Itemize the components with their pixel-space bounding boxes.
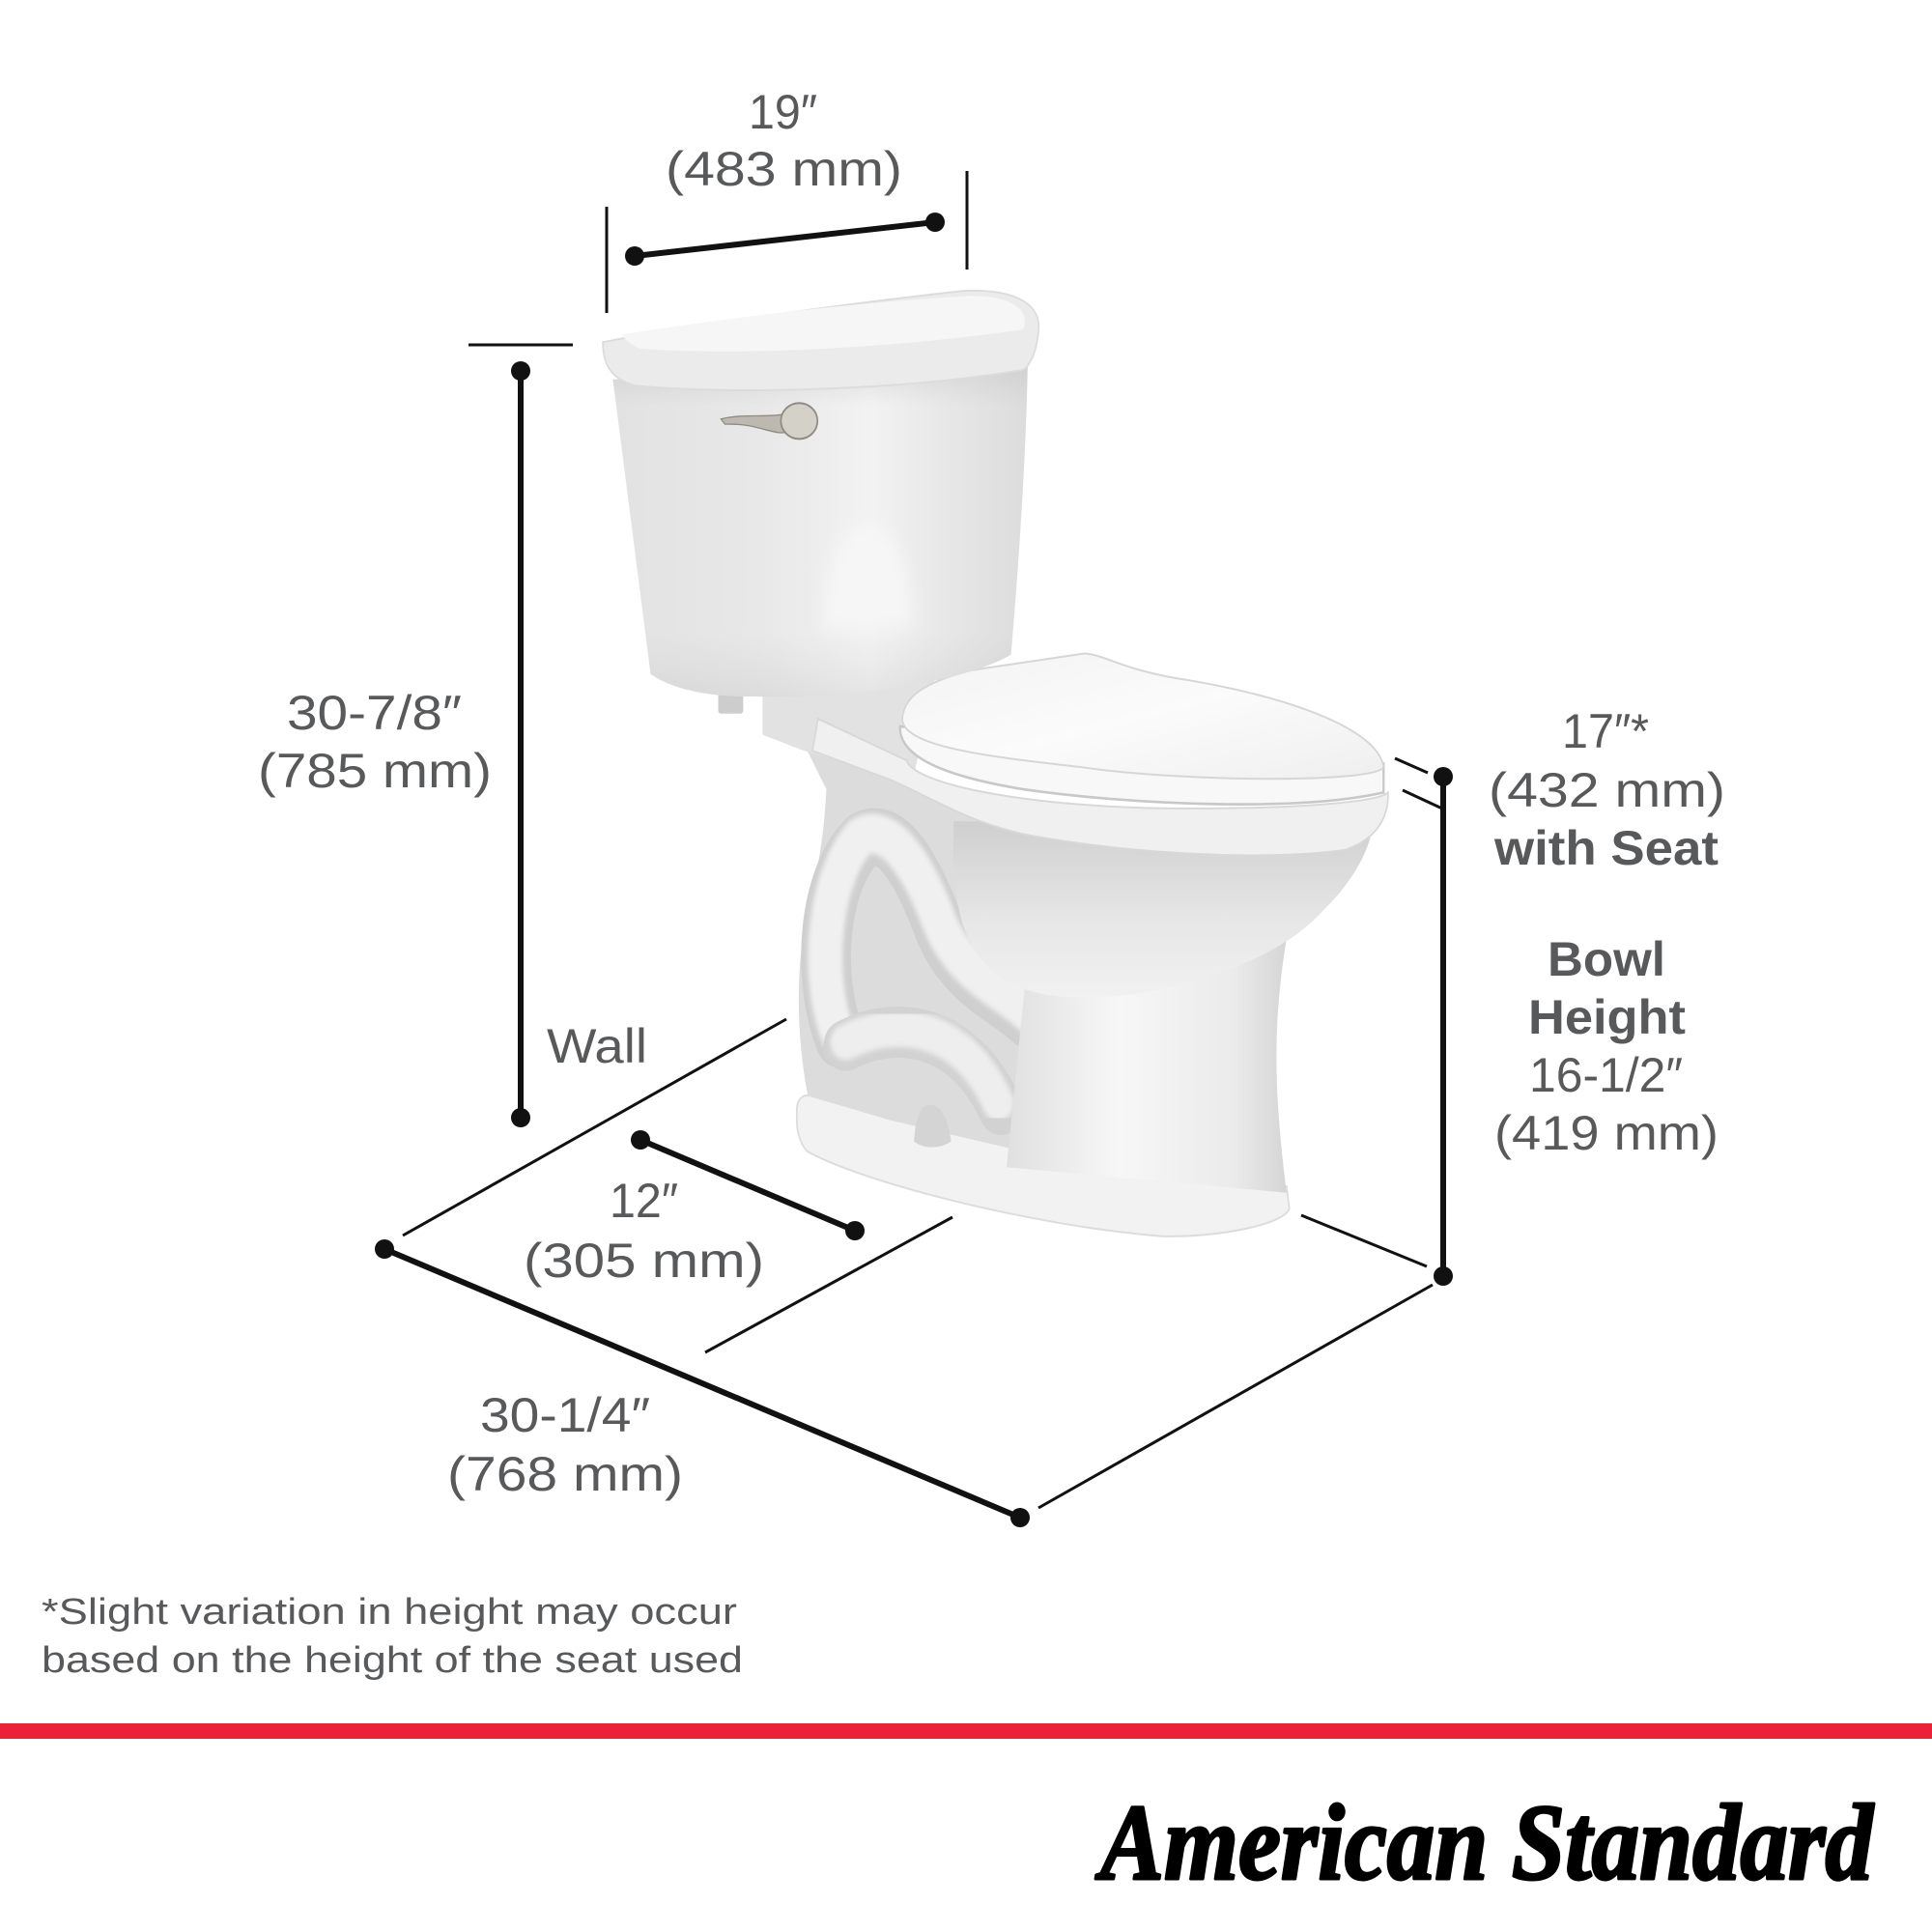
label: height with seat: 17″* [1562,704,1649,758]
bowl [953,821,1373,998]
tank connector neck [762,680,934,782]
label: wall: Wall [547,1019,647,1073]
dimension: overall height [469,345,573,1127]
label: tank width: 19″ [749,85,817,139]
label: height with seat: (432 mm) [1489,763,1725,817]
dimension: rough-in [631,1130,865,1240]
tank lid top [621,296,1025,352]
label: bowl height [1494,932,1719,1160]
flush handle [721,403,817,439]
footnote: based on the height of the seat used [42,1640,743,1681]
toilet base footprint [797,1095,1290,1236]
seat lid [902,653,1383,779]
footnote [42,1592,743,1681]
label: overall depth [447,1388,683,1501]
label: bowl height: (419 mm) [1494,1106,1719,1160]
label: rough-in: 12″ [610,1174,678,1228]
label: rough-in [524,1174,764,1288]
tank body [612,366,1028,696]
label: rough-in: (305 mm) [524,1234,764,1288]
dimension: tank width [607,171,967,313]
label: height with seat [1489,704,1725,875]
label: tank width: (483 mm) [666,142,902,196]
label: overall height: (785 mm) [258,744,492,798]
label: bowl height: Height [1528,990,1686,1044]
wall guide lines [403,1019,952,1352]
label: overall depth: 30-1/4″ [480,1388,650,1442]
dimension: overall depth [375,1239,1030,1527]
toilet illustration [603,291,1388,1236]
label: overall depth: (768 mm) [447,1447,683,1501]
seat ring [900,726,1383,805]
label: height with seat: with Seat [1493,821,1719,875]
bowl rim [812,719,1388,855]
label: bowl height: 16-1/2″ [1529,1048,1683,1102]
red divider bar [0,1723,1932,1739]
trapway tube [825,834,1029,1110]
label: overall height [258,686,492,798]
tank lower highlight [824,524,912,629]
dimension: bowl height [1038,758,1453,1508]
floor bolt cap [914,1105,952,1148]
toilet rear body [799,745,1029,1161]
label: tank width [666,85,902,196]
tank drain stub [719,690,743,714]
label: bowl height: Bowl [1548,932,1665,986]
pedestal [1007,923,1290,1193]
footnote: *Slight variation in height may occur [42,1592,737,1633]
label: overall height: 30-7/8″ [287,686,462,740]
tank lid [603,291,1038,390]
